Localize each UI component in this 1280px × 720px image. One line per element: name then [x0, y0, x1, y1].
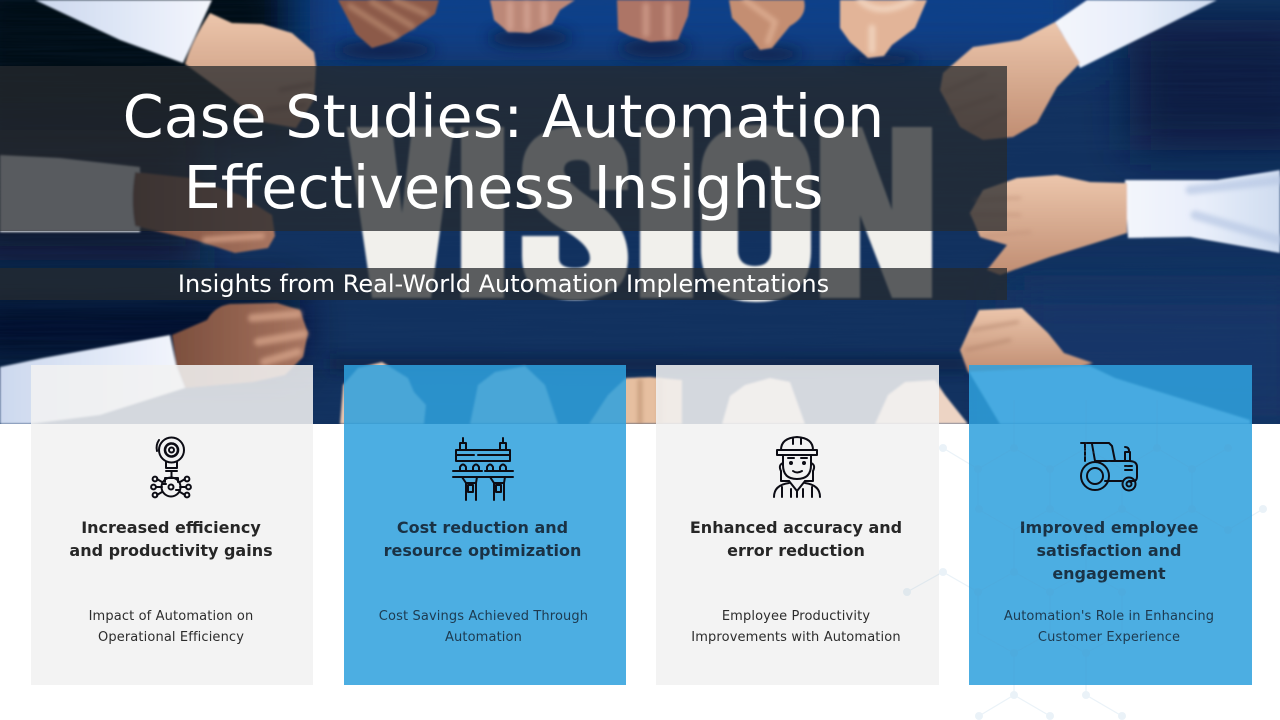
heading: [690, 518, 902, 560]
heading: [1020, 518, 1198, 583]
panel: increased efficiency: [31, 365, 313, 685]
title: [123, 82, 884, 222]
right middle arm: [1125, 170, 1280, 253]
heading: engagement: [1052, 564, 1166, 583]
heading: error reduction: [727, 541, 865, 560]
left middle arm: [0, 155, 140, 232]
heading: [69, 518, 273, 560]
description: Automation: [445, 630, 522, 645]
description: [691, 609, 901, 645]
icon: worker with hard hat: [773, 436, 821, 498]
description: Cost Savings Achieved Through: [379, 609, 588, 624]
description: Improvements with Automation: [691, 630, 901, 645]
top left arm: [35, 0, 212, 63]
background photo: hands around table with VISION lettering: [0, 0, 1280, 424]
heading: [384, 518, 581, 560]
heading: Cost reduction and: [397, 518, 568, 537]
description: Automation's Role in Enhancing: [1004, 609, 1214, 624]
VISION letters: [347, 125, 932, 302]
heading: and productivity gains: [69, 541, 273, 560]
panel: cost reduction: [344, 365, 626, 685]
bottom left arm: [0, 335, 185, 424]
title band: [0, 66, 1007, 231]
heading: Increased efficiency: [81, 518, 261, 537]
right bottom hand: [960, 308, 1093, 372]
title: Effectiveness Insights: [184, 153, 823, 222]
icon: tractor: [1080, 442, 1138, 492]
description: Customer Experience: [1038, 630, 1180, 645]
soft finger shading: [205, 0, 1280, 424]
description: Impact of Automation on: [89, 609, 253, 624]
top fists: [338, 0, 439, 48]
panel: employee satisfaction: [969, 365, 1252, 685]
description: Operational Efficiency: [98, 630, 244, 645]
bottom fists: [340, 362, 426, 424]
heading: satisfaction and: [1037, 541, 1181, 560]
icon: bridge structure: [452, 437, 514, 501]
description: Employee Productivity: [722, 609, 870, 624]
description: [1004, 609, 1214, 645]
title: Case Studies: Automation: [123, 82, 884, 151]
subtitle: Insights from Real-World Automation Implementations: [178, 270, 829, 298]
description: [89, 609, 253, 645]
heading: Improved employee: [1020, 518, 1198, 537]
panel: enhanced accuracy: [656, 365, 939, 685]
heading: Enhanced accuracy and: [690, 518, 902, 537]
icon: light bulb with gear and circuit: [150, 436, 192, 498]
heading: resource optimization: [384, 541, 581, 560]
subtitle band: [0, 268, 1007, 300]
description: [379, 609, 588, 645]
top right arm: [1055, 0, 1217, 68]
